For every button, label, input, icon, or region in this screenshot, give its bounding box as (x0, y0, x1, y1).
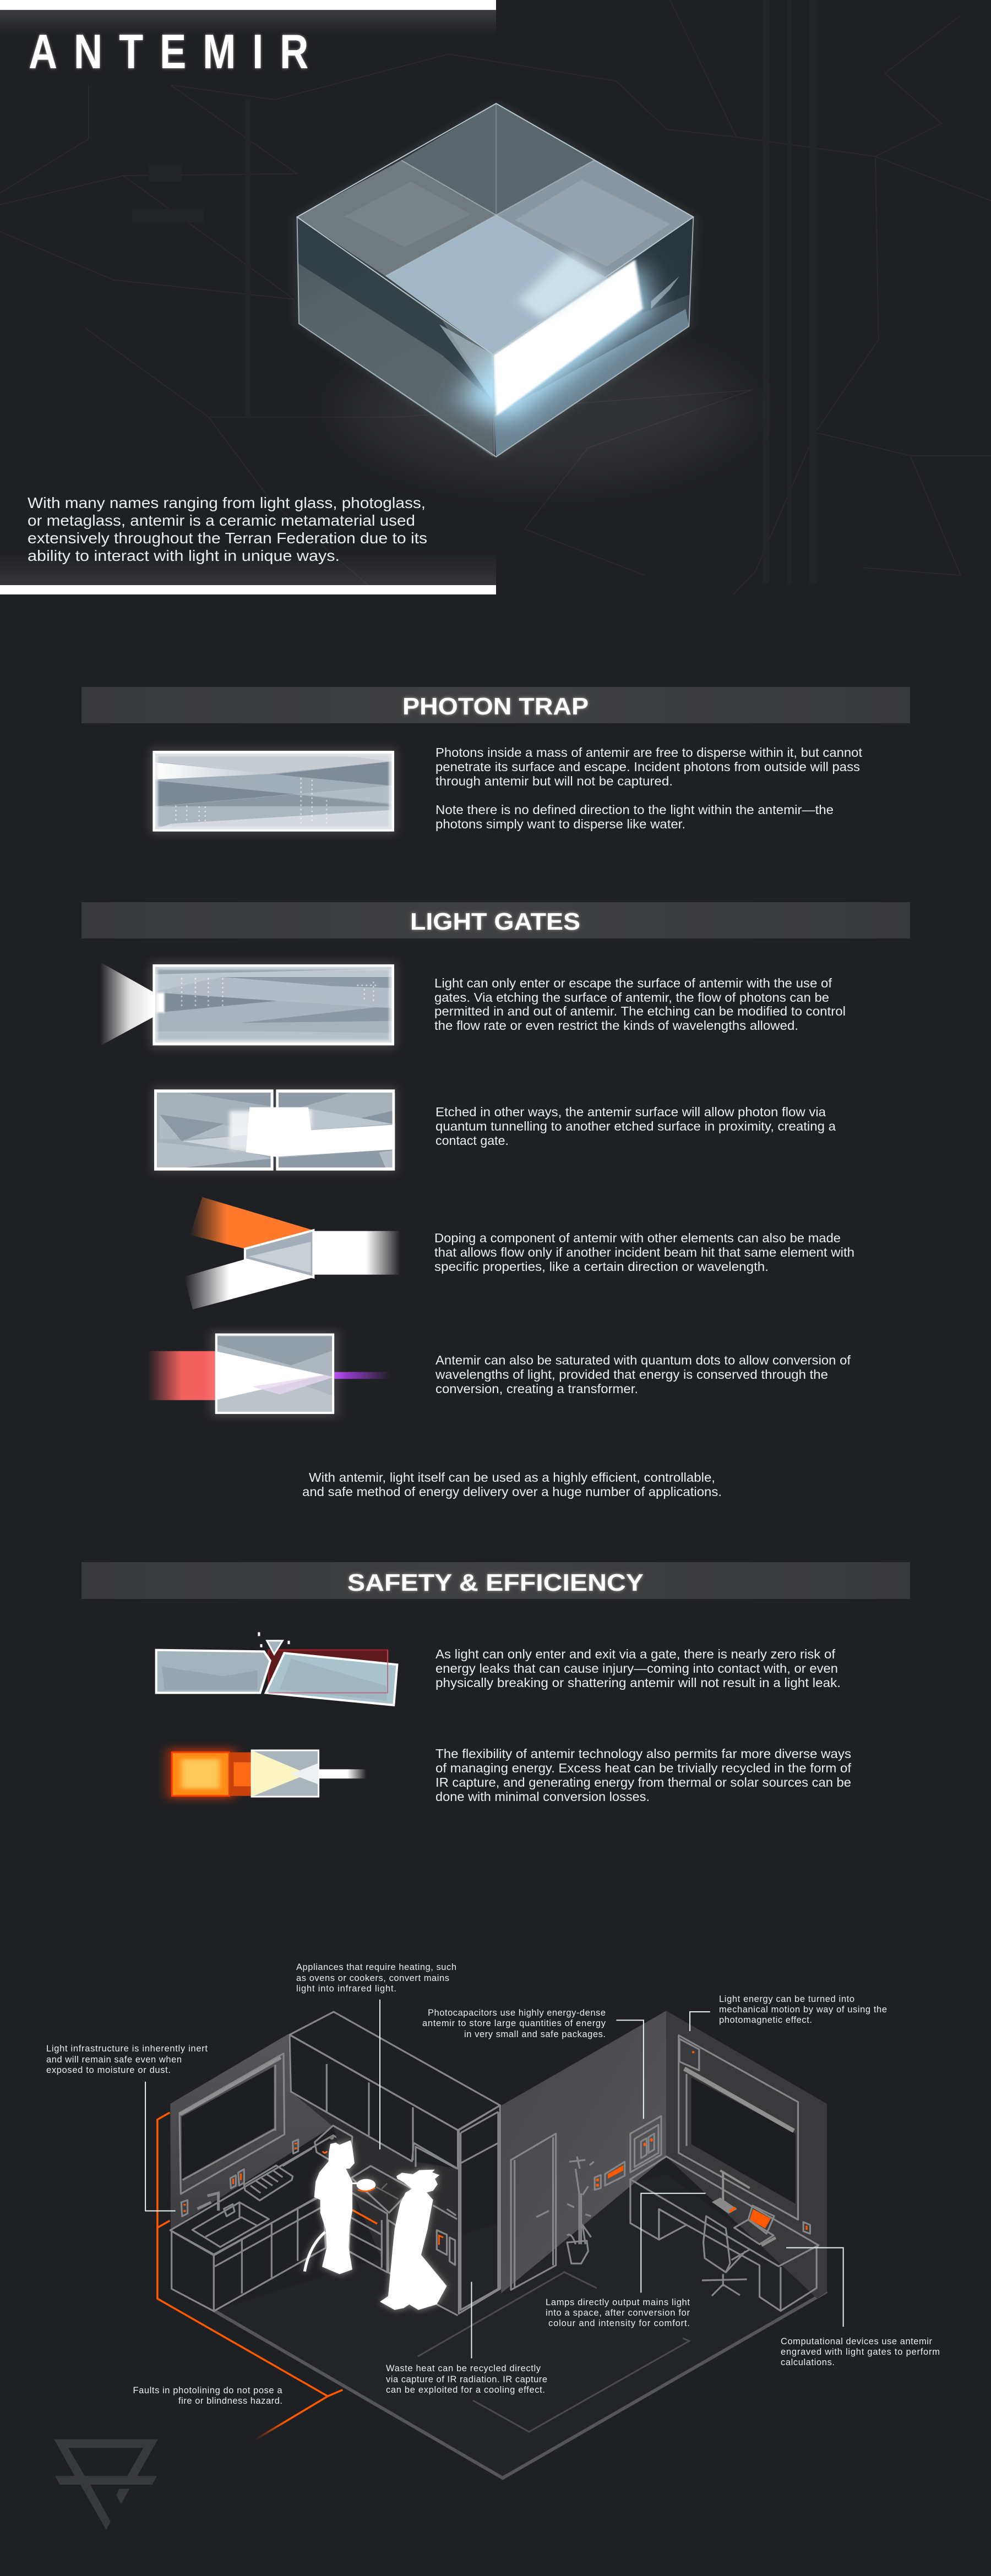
callout: photocapacitors: antemir to store large quantities of energy (422, 2018, 606, 2028)
callout: computational (781, 2337, 940, 2367)
right lower unit (433, 2206, 458, 2316)
cube edges (297, 103, 693, 457)
callout: lamps (546, 2297, 690, 2328)
light panel (605, 2162, 625, 2186)
office right wall (666, 2011, 827, 2299)
door (511, 2133, 556, 2290)
section bar: light gates (81, 902, 910, 938)
dark red outline of unbroken block (269, 1650, 388, 1693)
diagram: broken antemir (156, 1632, 397, 1705)
window (179, 2054, 285, 2194)
diagram: transformer (148, 1330, 390, 1417)
callout leader lines (145, 2000, 843, 2358)
text: doped gate: that allows flow only if another incident beam hit that same element with (434, 1245, 854, 1259)
photocapacitor panel (630, 2116, 661, 2172)
callout: lamps: Lamps directly output mains light (546, 2297, 690, 2307)
logo (54, 2439, 158, 2530)
callout: lamps: into a space, after conversion for (546, 2308, 690, 2318)
dish rack (244, 2165, 293, 2201)
left shard (156, 1650, 270, 1693)
title: ANTEMIR (29, 25, 308, 79)
cube top front quad (385, 215, 607, 354)
office left wall (501, 2011, 666, 2294)
callout: lamps: colour and intensity for comfort. (548, 2318, 690, 2328)
tall cabinet (459, 2105, 500, 2313)
orange input beam (190, 1197, 313, 1249)
hero faint vertical data columns (132, 0, 817, 583)
text: photon trap: penetrate its surface and escape. Incident photons from outside will pass (435, 760, 860, 774)
callout: photomagnetic: Light energy can be turned into (719, 1994, 854, 2004)
text: light gate (434, 976, 846, 1033)
office room (501, 2011, 827, 2311)
diagram: photon trap crystal (150, 749, 396, 834)
hero top and bottom glow (0, 10, 496, 585)
sink base cabinet (172, 2231, 214, 2311)
text: light gate: gates. Via etching the surface of antemir, the flow of photons can be (434, 990, 829, 1005)
callout: appliances (296, 1962, 456, 1994)
purple output beam (334, 1372, 390, 1379)
oven (349, 2192, 396, 2277)
text: transformer (435, 1353, 851, 1396)
callout: photomagnetic: mechanical motion by way of using the (719, 2005, 887, 2015)
callout: light infrastructure: exposed to moisture or dust. (46, 2065, 171, 2075)
cube top left quad (297, 160, 496, 276)
text: light gate: Light can only enter or escape the surface of antemir with the use of (434, 976, 832, 990)
office chair (702, 2216, 750, 2296)
white output beam (313, 1231, 401, 1275)
bottom white bar (0, 585, 496, 594)
text: safety (435, 1647, 841, 1690)
wall outlets (181, 2140, 298, 2216)
intro paragraph: extensively throughout the Terran Federation due to its (28, 530, 427, 547)
text: contact gate: quantum tunnelling to another etched surface in proximity, creating a (435, 1119, 836, 1133)
kitchen left run (170, 2034, 385, 2311)
callout: waste heat: via capture of IR radiation. IR capture (386, 2375, 547, 2384)
text: photon trap: through antemir but will not be captured. (435, 774, 673, 788)
callout: appliances: light into infrared light. (296, 1984, 396, 1994)
text: doped gate (434, 1231, 854, 1274)
white output beam (319, 1769, 366, 1778)
intro paragraph (28, 494, 427, 564)
text: efficiency: of managing energy. Excess heat can be trivially recycled in the form of (435, 1761, 852, 1775)
callout: faults: Faults in photolining do not pose a (133, 2386, 282, 2395)
hero faint geometric background lines (0, 0, 991, 594)
callout: appliances: Appliances that require heating, such (296, 1962, 456, 1972)
intro paragraph: With many names ranging from light glass, photoglass, (28, 494, 426, 511)
text: efficiency: IR capture, and generating energy from thermal or solar sources can be (435, 1775, 851, 1789)
white input beam (184, 1259, 313, 1309)
diagram: heat recycling (167, 1748, 366, 1799)
top white bar (0, 0, 496, 10)
callout: photocapacitors: Photocapacitors use highly energy-dense (428, 2008, 606, 2018)
centered statement: and safe method of energy delivery over a huge number of applications. (302, 1485, 722, 1499)
wall outlet (595, 2175, 601, 2190)
office desk (630, 2157, 819, 2311)
red outline over shard (269, 1650, 388, 1693)
callout: light infrastructure: and will remain safe even when (46, 2055, 182, 2065)
cube top back quad (401, 103, 594, 215)
callout: photocapacitors: in very small and safe packages. (464, 2029, 606, 2039)
desk lamp (712, 2170, 750, 2214)
text: efficiency: The flexibility of antemir technology also permits far more diverse ways (435, 1747, 851, 1761)
cube ground glow (354, 340, 733, 479)
centered statement (302, 1470, 722, 1499)
isometric room: floor (214, 2174, 827, 2478)
cube top right quad (496, 160, 693, 278)
text: light gate: permitted in and out of antemir. The etching can be modified to control (434, 1004, 846, 1018)
callout: waste heat (386, 2364, 547, 2395)
right shard (266, 1653, 397, 1705)
text: doped gate: Doping a component of antemir with other elements can also be made (434, 1231, 841, 1245)
kitchen side wall (291, 2092, 457, 2313)
text: photon trap: photons simply want to disperse like water. (435, 817, 685, 831)
callout: photomagnetic: photomagnetic effect. (719, 2015, 812, 2025)
floor rug outline (473, 2338, 689, 2432)
cube right side face (493, 217, 693, 457)
callout: faults (133, 2386, 282, 2406)
text: doped gate: specific properties, like a certain direction or wavelength. (434, 1259, 769, 1274)
callout: computational: Computational devices use antemir (781, 2337, 933, 2346)
callout: computational: calculations. (781, 2357, 835, 2367)
text: safety: As light can only enter and exit via a gate, there is nearly zero risk of (435, 1647, 836, 1661)
text: efficiency: done with minimal conversion losses. (435, 1789, 650, 1804)
intro paragraph: ability to interact with light in unique ways. (28, 547, 340, 564)
laptop (734, 2206, 776, 2247)
text: transformer: conversion, creating a transformer. (435, 1382, 638, 1396)
callout: computational: engraved with light gates to perform (781, 2347, 940, 2357)
diagram: contact gate (153, 1087, 398, 1172)
text: transformer: wavelengths of light, provided that energy is conserved through the (435, 1367, 828, 1382)
callout: appliances: as ovens or cookers, convert mains (296, 1973, 449, 1983)
heat transformer crystal (252, 1750, 319, 1797)
kitchen upper and right units (290, 2012, 500, 2316)
kitchen back wall (170, 2034, 333, 2229)
diagram: light gate crystal (150, 962, 396, 1047)
person two silhouette (380, 2170, 447, 2310)
callout: light infrastructure (46, 2044, 208, 2075)
text: safety: energy leaks that can cause injury—coming into contact with, or even (435, 1661, 838, 1676)
doped crystal (245, 1230, 313, 1278)
intro paragraph: or metaglass, antemir is a ceramic metamaterial used (28, 512, 415, 529)
backsplash line (282, 2148, 312, 2166)
text: efficiency (435, 1747, 852, 1804)
heading: safety and efficiency: SAFETY & EFFICIENCY (347, 1569, 644, 1596)
callout: photomagnetic (719, 1994, 887, 2025)
cube left side face (297, 217, 493, 457)
centered statement: With antemir, light itself can be used as a highly efficient, controllable, (309, 1470, 715, 1485)
faucet (197, 2193, 219, 2211)
entering light beam (100, 962, 153, 1046)
office window (679, 2035, 798, 2220)
text: contact gate: Etched in other ways, the antemir surface will allow photon flow via (435, 1105, 826, 1119)
section bar: safety and efficiency (81, 1562, 910, 1599)
person one silhouette (304, 2140, 375, 2274)
callout: waste heat: Waste heat can be recycled directly (386, 2364, 541, 2373)
callout: faults: fire or blindness hazard. (178, 2396, 282, 2406)
flying fragment and sparks (258, 1632, 290, 1654)
section bar: photon trap (81, 687, 910, 723)
antemir glass cube (297, 103, 733, 479)
potted plant (567, 2157, 594, 2263)
sink (192, 2202, 269, 2247)
callout: waste heat: can be exploited for a cooling effect. (386, 2385, 545, 2395)
text: photon trap: Note there is no defined direction to the light within the antemir—the (435, 803, 834, 817)
text: contact gate (435, 1105, 836, 1148)
text: photon trap (435, 745, 863, 831)
callout: photocapacitors (422, 2008, 606, 2039)
photolining orange wiring (157, 2113, 342, 2439)
cabinet top face (290, 2012, 500, 2130)
callout: light infrastructure: Light infrastructure is inherently inert (46, 2044, 208, 2054)
red input beam (148, 1351, 215, 1400)
text: contact gate: contact gate. (435, 1133, 509, 1148)
cube white light block (493, 259, 643, 416)
text: light gate: the flow rate or even restrict the kinds of wavelengths allowed. (434, 1018, 798, 1033)
contact gate light (182, 1107, 395, 1157)
office wall outlet (803, 2222, 810, 2234)
text: safety: physically breaking or shattering antemir will not result in a light leak. (435, 1676, 841, 1690)
heading: light gates: LIGHT GATES (410, 908, 580, 935)
cube outer glow (297, 103, 693, 457)
lower cabinets (214, 2194, 326, 2311)
diagram: doped gate (184, 1197, 401, 1309)
wall appliance (315, 2126, 352, 2160)
hob (351, 2166, 412, 2213)
orange heat glow (167, 1748, 235, 1799)
upper cabinets (290, 2035, 458, 2169)
heat beam (229, 1753, 252, 1796)
text: photon trap: Photons inside a mass of antemir are free to disperse within it, but cannot (435, 745, 863, 760)
heading: photon trap: PHOTON TRAP (402, 693, 589, 720)
counter top (170, 2135, 385, 2255)
cube white light block glow (461, 259, 651, 425)
text: transformer: Antemir can also be saturated with quantum dots to allow conversion of (435, 1353, 851, 1367)
heat source block (172, 1753, 229, 1796)
